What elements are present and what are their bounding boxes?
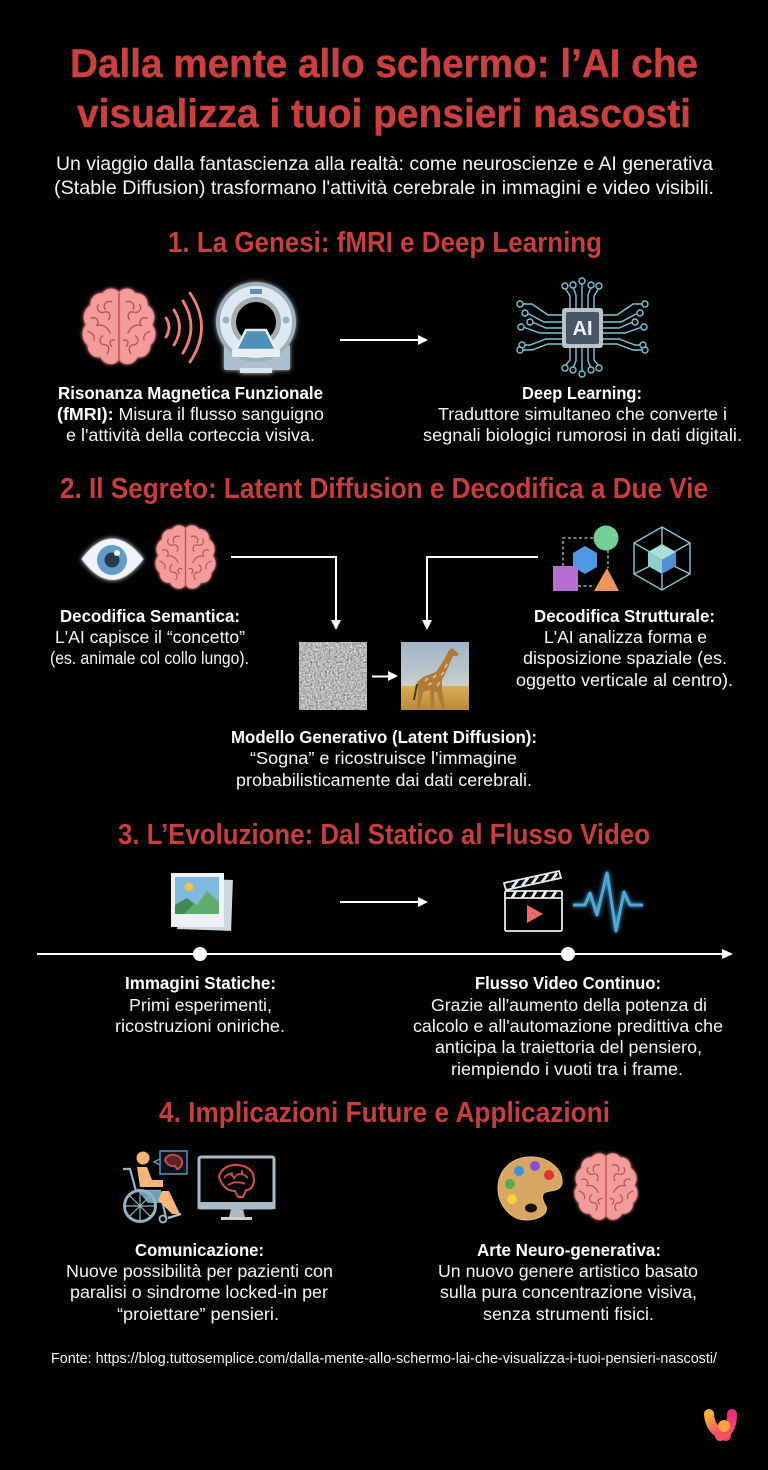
icon: AI chip (517, 278, 648, 377)
arrow: semantic to generative (231, 557, 341, 630)
text: structural decoding (516, 606, 733, 690)
logo (709, 1414, 732, 1436)
text: continuous video (413, 973, 723, 1079)
heading: section 2: 2. Il Segreto: Latent Diffusion e Decodifica a Due Vie (60, 473, 708, 505)
text: neuro-generative art (438, 1240, 698, 1324)
text: communication: Nuove possibilità per pazienti con (66, 1261, 333, 1281)
text: semantic decoding: (es. animale col collo lungo). (50, 648, 249, 668)
timeline (37, 947, 733, 961)
text: semantic decoding (50, 606, 249, 668)
icon: pulse wave (573, 873, 643, 931)
icon: photo stack (171, 873, 233, 931)
text: neuro-generative art: Arte Neuro-generativa: (477, 1240, 661, 1260)
image: reconstructed giraffe (401, 642, 469, 710)
text: continuous video: Grazie all'aumento della potenza di (431, 995, 707, 1015)
text: neuro-generative art: sulla pura concentrazione visiva, (440, 1282, 697, 1302)
source line: Fonte: https://blog.tuttosemplice.com/dalla-mente-allo-schermo-lai-che-visualizza-i-tuoi-pensieri-nascosti/ (51, 1351, 717, 1367)
icon: clapperboard (504, 871, 562, 931)
heading: section 3: 3. L’Evoluzione: Dal Statico al Flusso Video (118, 819, 650, 851)
text: fMRI (57, 383, 324, 445)
text: structural decoding: Decodifica Strutturale: (534, 606, 715, 626)
text: generative model (231, 727, 537, 790)
icon: painter palette (498, 1157, 562, 1220)
subtitle: Un viaggio dalla fantascienza alla realtà: come neuroscienze e AI generativa (56, 153, 713, 175)
icon: monitor with brain (198, 1157, 276, 1220)
text: semantic decoding: Decodifica Semantica: (60, 606, 240, 626)
text: deep learning: Traduttore simultaneo che converte i (438, 404, 727, 424)
text: fMRI: (fMRI): Misura il flusso sanguigno (57, 404, 324, 424)
title: Dalla mente allo schermo: l’AI che (70, 42, 698, 86)
text: generative model: “Sogna” e ricostruisce l'immagine (250, 748, 517, 768)
subtitle (54, 153, 714, 199)
text: static images: Immagini Statiche: (125, 973, 276, 993)
title (70, 42, 698, 136)
text: continuous video: riempiendo i vuoti tra i frame. (451, 1059, 683, 1079)
heading: section 4: 4. Implicazioni Future e Applicazioni (159, 1097, 610, 1129)
subtitle: (Stable Diffusion) trasformano l'attività cerebrale in immagini e video visibili. (54, 177, 714, 199)
text: static images: ricostruzioni oniriche. (115, 1016, 285, 1036)
text: structural decoding: L'AI analizza forma e (544, 627, 707, 647)
icon: brain with signal waves (83, 289, 202, 364)
text: static images (115, 973, 285, 1036)
text: communication: “proiettare” pensieri. (117, 1304, 279, 1324)
text: continuous video: anticipa la traiettoria del pensiero, (435, 1037, 702, 1057)
text: continuous video: calcolo e all'automazione predittiva che (413, 1016, 723, 1036)
heading: section 1: 1. La Genesi: fMRI e Deep Learning (168, 227, 602, 259)
text: structural decoding: disposizione spaziale (es. (523, 648, 727, 668)
text: continuous video: Flusso Video Continuo: (475, 973, 661, 993)
icon: brain (575, 1154, 637, 1219)
text: neuro-generative art: Un nuovo genere artistico basato (438, 1261, 698, 1281)
icon: brain (156, 526, 215, 588)
arrow: fMRI to deep learning (340, 335, 428, 345)
icon: patient in wheelchair (123, 1151, 187, 1222)
text: generative model: Modello Generativo (Latent Diffusion): (231, 727, 537, 747)
icon: wireframe cube (634, 527, 690, 590)
text: semantic decoding: L'AI capisce il “concetto” (55, 627, 245, 647)
icon: AI chip: AI (572, 318, 592, 340)
text: generative model: probabilisticamente dai dati cerebrali. (236, 770, 532, 790)
image: latent noise (299, 642, 367, 710)
icon: MRI scanner (218, 284, 294, 373)
text: communication: paralisi o sindrome locked-in per (70, 1282, 328, 1302)
arrow: noise to image (372, 671, 398, 681)
arrow: static to video (340, 897, 428, 907)
text: fMRI: e l'attività della corteccia visiva. (66, 425, 315, 445)
text: deep learning (423, 383, 742, 445)
text: fMRI: Risonanza Magnetica Funzionale (58, 383, 323, 403)
text: structural decoding: oggetto verticale al centro). (516, 670, 733, 690)
text: neuro-generative art: senza strumenti fisici. (483, 1304, 654, 1324)
text: communication (66, 1240, 333, 1324)
icon: geometric shapes (553, 526, 619, 591)
icon: eye (82, 539, 143, 580)
arrow: structural to generative (422, 557, 538, 630)
title: visualizza i tuoi pensieri nascosti (77, 92, 691, 136)
text: communication: Comunicazione: (135, 1240, 264, 1260)
text: deep learning: Deep Learning: (522, 383, 642, 403)
text: deep learning: segnali biologici rumorosi in dati digitali. (423, 425, 742, 445)
text: static images: Primi esperimenti, (129, 995, 272, 1015)
